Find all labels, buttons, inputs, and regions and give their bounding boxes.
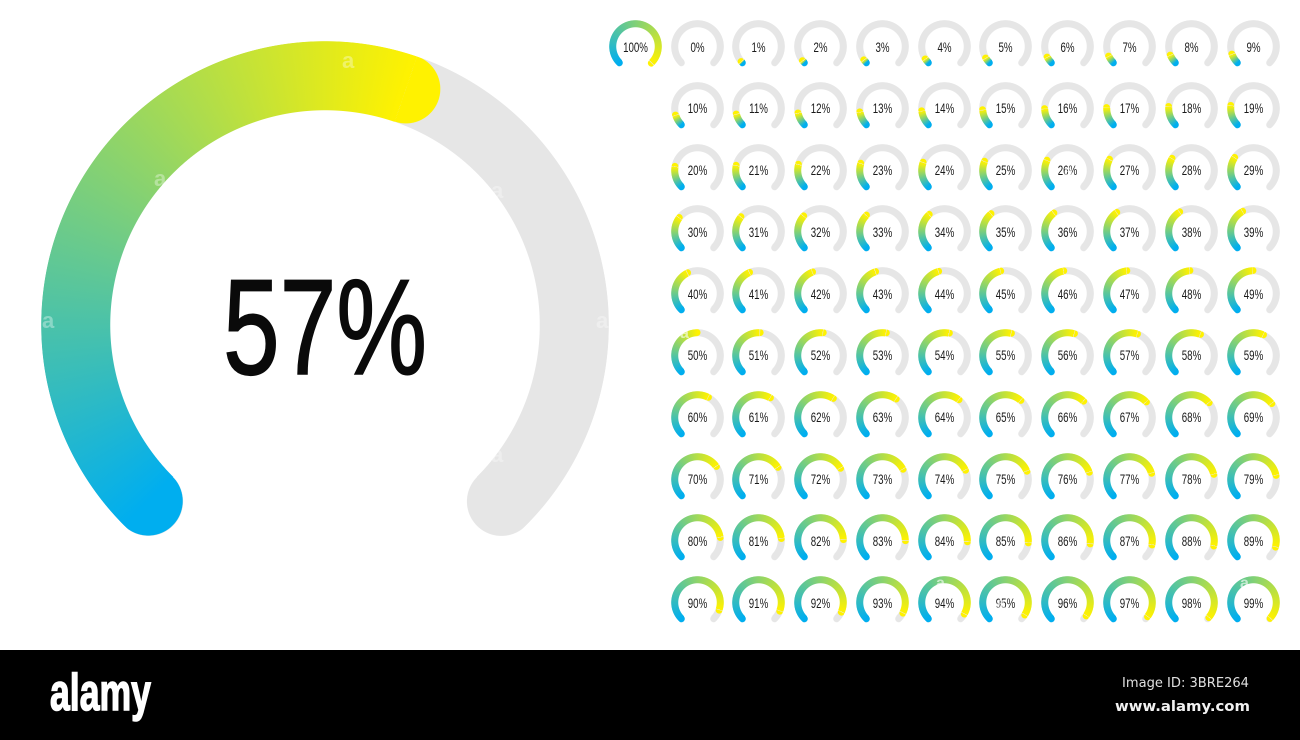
- gauge: 1%: 1%: [752, 40, 766, 54]
- watermark marks on small gauges: a: [996, 595, 1005, 612]
- watermark marks on large gauge: a: [342, 48, 354, 73]
- gauge: 99%: 99%: [1243, 596, 1263, 611]
- gauge: 13%: [856, 82, 909, 128]
- gauge: 46%: 46%: [1058, 287, 1078, 302]
- gauge: 74%: 74%: [934, 472, 954, 487]
- gauge: 44%: 44%: [934, 287, 954, 302]
- gauge: 12%: 12%: [811, 101, 830, 116]
- gauge: 68%: [1165, 391, 1218, 438]
- gauge: 93%: 93%: [873, 596, 892, 611]
- gauge: 56%: [1041, 329, 1094, 376]
- gauge: 97%: 97%: [1120, 596, 1139, 611]
- gauge: 54%: 54%: [934, 348, 954, 363]
- gauge: 23%: [856, 144, 909, 190]
- gauge: 35%: [979, 205, 1032, 252]
- gauge: 4%: [918, 20, 971, 66]
- gauge: 31%: 31%: [749, 225, 769, 240]
- gauge: 3%: [856, 20, 909, 66]
- gauge: 13%: 13%: [873, 101, 892, 116]
- gauge: 15%: 15%: [996, 101, 1016, 116]
- watermark marks on large gauge: a: [596, 308, 608, 333]
- gauge: 85%: [979, 514, 1032, 567]
- gauge: 86%: [1041, 514, 1094, 567]
- gauge: 58%: [1165, 329, 1218, 376]
- gauge: 44%: [918, 267, 971, 314]
- watermark marks on large gauge: a: [42, 308, 54, 333]
- gauge: 100%: [609, 20, 662, 67]
- gauge: 50%: [671, 329, 724, 376]
- gauge: 58%: 58%: [1182, 348, 1201, 363]
- gauge: 94%: 94%: [934, 596, 954, 611]
- gauge: 47%: 47%: [1120, 287, 1139, 302]
- gauge: 10%: 10%: [687, 101, 707, 116]
- gauge: 9%: [1227, 20, 1280, 66]
- gauge: 57%: [1103, 329, 1156, 376]
- gauge: 61%: 61%: [749, 410, 769, 425]
- gauge: 28%: [1165, 144, 1218, 190]
- gauge: 82%: [794, 514, 847, 567]
- gauge: 15%: [979, 82, 1032, 128]
- gauge: 60%: [671, 391, 724, 438]
- gauge: 20%: [671, 144, 724, 190]
- gauge: 91%: [732, 576, 785, 629]
- gauge: 59%: [1227, 329, 1280, 376]
- gauge: 28%: 28%: [1182, 163, 1201, 178]
- gauge: 3%: 3%: [875, 40, 889, 54]
- watermark marks on large gauge: a: [154, 166, 166, 191]
- gauge: 87%: 87%: [1120, 534, 1139, 549]
- gauge: 50%: 50%: [687, 348, 707, 363]
- gauge: 80%: 80%: [687, 534, 707, 549]
- gauge: 33%: [856, 205, 909, 252]
- gauge: 2%: 2%: [814, 40, 828, 54]
- gauge: 76%: [1041, 453, 1094, 506]
- gauge: 18%: 18%: [1182, 101, 1201, 116]
- gauge: 71%: 71%: [749, 472, 769, 487]
- gauge: 53%: 53%: [873, 348, 892, 363]
- gauge: 62%: [794, 391, 847, 438]
- gauge: 6%: [1041, 20, 1094, 66]
- gauge: 17%: 17%: [1120, 101, 1139, 116]
- footer image id and url: [1100, 670, 1280, 720]
- gauge: 95%: 95%: [996, 596, 1016, 611]
- small gauge grid: [609, 20, 1280, 622]
- watermark marks on small gauges: a: [936, 575, 945, 592]
- watermark marks on small gauges: a: [1064, 163, 1073, 180]
- gauge: 52%: 52%: [811, 348, 830, 363]
- gauge: 77%: [1103, 453, 1156, 506]
- gauge: 83%: [856, 514, 909, 567]
- gauge: 63%: [856, 391, 909, 438]
- gauge: 18%: [1165, 82, 1218, 128]
- large gauge: 57%: [41, 41, 609, 536]
- gauge: 100%: 100%: [623, 40, 648, 54]
- gauge: 64%: [918, 391, 971, 438]
- gauge: 4%: 4%: [937, 40, 951, 54]
- gauge: 1%: [732, 20, 785, 66]
- gauge: 73%: [856, 453, 909, 500]
- gauge: 26%: 26%: [1058, 163, 1078, 178]
- gauge: 55%: [979, 329, 1032, 376]
- gauge: 43%: 43%: [873, 287, 892, 302]
- gauge: 30%: [671, 205, 724, 252]
- gauge: 63%: 63%: [873, 410, 892, 425]
- gauge: 11%: 11%: [749, 101, 768, 116]
- gauge: 42%: [794, 267, 847, 314]
- gauge: 21%: [732, 144, 785, 190]
- gauge: 56%: 56%: [1058, 348, 1078, 363]
- gauge: 34%: 34%: [934, 225, 954, 240]
- gauge: 14%: 14%: [934, 101, 954, 116]
- gauge: 41%: [732, 267, 785, 314]
- gauge: 76%: 76%: [1058, 472, 1078, 487]
- gauge: 75%: [979, 453, 1032, 506]
- gauge: 12%: [794, 82, 847, 128]
- gauge: 27%: 27%: [1120, 163, 1139, 178]
- gauge: 7%: 7%: [1123, 40, 1137, 54]
- gauge: 2%: [794, 20, 847, 66]
- gauge: 40%: [671, 267, 724, 314]
- watermark marks on small gauges: a: [680, 325, 689, 342]
- gauge: 5%: [979, 20, 1032, 66]
- gauge: 59%: 59%: [1243, 348, 1263, 363]
- gauge: 35%: 35%: [996, 225, 1016, 240]
- watermark marks on small gauges: [660, 150, 1290, 620]
- gauge: 65%: 65%: [996, 410, 1016, 425]
- gauge: 45%: 45%: [996, 287, 1016, 302]
- gauge: 42%: 42%: [811, 287, 830, 302]
- gauge: 27%: [1103, 144, 1156, 190]
- gauge: 39%: 39%: [1243, 225, 1263, 240]
- gauge: 75%: 75%: [996, 472, 1016, 487]
- gauge: 29%: 29%: [1243, 163, 1263, 178]
- gauge: 88%: 88%: [1182, 534, 1201, 549]
- gauge: 21%: 21%: [749, 163, 769, 178]
- gauge: 48%: [1165, 267, 1218, 314]
- gauge: 70%: 70%: [687, 472, 707, 487]
- gauge: 92%: 92%: [811, 596, 830, 611]
- gauge: 5%: 5%: [999, 40, 1013, 54]
- gauge: 19%: [1227, 82, 1280, 128]
- gauge: 23%: 23%: [873, 163, 892, 178]
- gauge: 29%: [1227, 144, 1280, 190]
- gauge: 72%: 72%: [811, 472, 830, 487]
- gauge: 70%: [671, 453, 724, 500]
- gauge: 9%: 9%: [1246, 40, 1260, 54]
- gauge: 32%: [794, 205, 847, 252]
- gauge: 96%: [1041, 576, 1094, 629]
- gauge: 77%: 77%: [1120, 472, 1139, 487]
- gauge: 86%: 86%: [1058, 534, 1078, 549]
- gauge: 37%: [1103, 205, 1156, 252]
- footer image id and url: Image ID: 3BRE264: [1122, 675, 1249, 691]
- gauge: 46%: [1041, 267, 1094, 314]
- footer bar: [0, 650, 1300, 740]
- gauge: 80%: [670, 514, 724, 567]
- gauge: 45%: [979, 267, 1032, 314]
- gauge: 53%: [856, 329, 909, 376]
- gauge: 7%: [1103, 20, 1156, 66]
- gauge: 71%: [732, 453, 785, 500]
- gauge: 38%: [1165, 205, 1218, 252]
- gauge: 97%: [1103, 576, 1156, 629]
- gauge: 26%: [1041, 144, 1094, 190]
- gauge: 49%: 49%: [1243, 287, 1263, 302]
- gauge: 57%: 57%: [1120, 348, 1139, 363]
- gauge: 74%: [918, 453, 971, 500]
- gauge: 40%: 40%: [687, 287, 707, 302]
- gauge: 51%: 51%: [749, 348, 769, 363]
- gauge: 83%: 83%: [873, 534, 892, 549]
- gauge: 14%: [918, 82, 971, 128]
- gauge: 90%: 90%: [687, 596, 707, 611]
- gauge: 43%: [856, 267, 909, 314]
- gauge: 8%: 8%: [1184, 40, 1198, 54]
- gauge: 0%: [671, 20, 724, 66]
- gauge: 81%: [732, 514, 785, 567]
- gauge: 66%: [1041, 391, 1094, 438]
- gauge: 19%: 19%: [1243, 101, 1263, 116]
- gauge: 52%: [794, 329, 847, 376]
- footer image id and url: www.alamy.com: [1115, 699, 1250, 715]
- gauge: 25%: [979, 144, 1032, 190]
- gauge: 79%: [1227, 453, 1280, 506]
- watermark marks on small gauges: a: [1240, 575, 1249, 592]
- gauge: 94%: [918, 576, 971, 629]
- gauge: 89%: 89%: [1243, 534, 1263, 549]
- gauge: 24%: 24%: [934, 163, 954, 178]
- gauge: 72%: [794, 453, 847, 500]
- gauge: 62%: 62%: [811, 410, 830, 425]
- gauge: 37%: 37%: [1120, 225, 1139, 240]
- gauge: 96%: 96%: [1058, 596, 1078, 611]
- gauge: 36%: 36%: [1058, 225, 1078, 240]
- gauge: 60%: 60%: [687, 410, 707, 425]
- watermark marks on large gauge: a: [491, 442, 503, 467]
- gauge: 79%: 79%: [1243, 472, 1263, 487]
- gauge: 78%: 78%: [1182, 472, 1201, 487]
- gauge: 30%: 30%: [687, 225, 707, 240]
- gauge: 69%: [1227, 391, 1280, 438]
- gauge: 65%: [979, 391, 1032, 438]
- gauge: 22%: [794, 144, 847, 190]
- gauge: 73%: 73%: [873, 472, 892, 487]
- gauge: 20%: 20%: [687, 163, 707, 178]
- gauge: 92%: [794, 576, 847, 629]
- gauge: 82%: 82%: [811, 534, 830, 549]
- watermark marks on large gauge: [42, 48, 608, 467]
- gauge: 49%: [1227, 267, 1280, 314]
- gauge: 84%: [918, 514, 971, 567]
- gauge: 6%: 6%: [1061, 40, 1075, 54]
- gauge: 98%: [1165, 576, 1218, 629]
- gauge: 90%: [670, 576, 724, 629]
- gauge: 25%: 25%: [996, 163, 1016, 178]
- gauge: 54%: [918, 329, 971, 376]
- gauge: 17%: [1103, 82, 1156, 128]
- gauge: 69%: 69%: [1243, 410, 1263, 425]
- gauge: 67%: 67%: [1120, 410, 1139, 425]
- gauge: 64%: 64%: [934, 410, 954, 425]
- gauge: 84%: 84%: [934, 534, 954, 549]
- gauge: 51%: [732, 329, 785, 376]
- gauge: 8%: [1165, 20, 1218, 66]
- gauge: 32%: 32%: [811, 225, 830, 240]
- gauge: 55%: 55%: [996, 348, 1016, 363]
- gauge: 67%: [1103, 391, 1156, 438]
- gauge: 39%: [1227, 205, 1280, 252]
- gauge: 89%: [1227, 514, 1280, 567]
- gauge: 0%: 0%: [690, 40, 704, 54]
- gauge: 68%: 68%: [1182, 410, 1201, 425]
- gauge: 87%: [1103, 514, 1156, 567]
- gauge: 98%: 98%: [1182, 596, 1201, 611]
- gauge: 41%: 41%: [749, 287, 769, 302]
- gauge: 47%: [1103, 267, 1156, 314]
- gauge: 93%: [856, 576, 909, 629]
- gauge: 48%: 48%: [1182, 287, 1201, 302]
- gauge: 88%: [1165, 514, 1218, 567]
- gauge: 36%: [1041, 205, 1094, 252]
- gauge: 38%: 38%: [1182, 225, 1201, 240]
- gauge: 16%: [1041, 82, 1094, 128]
- gauge: 16%: 16%: [1058, 101, 1078, 116]
- gauge: 99%: [1227, 576, 1280, 629]
- gauge: 61%: [732, 391, 785, 438]
- gauge: 81%: 81%: [749, 534, 769, 549]
- gauge: 31%: [732, 205, 785, 252]
- gauge: 95%: [979, 576, 1032, 629]
- gauge: 11%: [732, 82, 785, 128]
- gauge: 34%: [918, 205, 971, 252]
- gauge: 66%: 66%: [1058, 410, 1078, 425]
- gauge: 33%: 33%: [873, 225, 892, 240]
- gauge: 91%: 91%: [749, 596, 769, 611]
- gauge: 24%: [918, 144, 971, 190]
- gauge: 78%: [1165, 453, 1218, 506]
- gauge: 22%: 22%: [811, 163, 830, 178]
- watermark marks on large gauge: a: [491, 178, 503, 203]
- gauge: 10%: [671, 82, 724, 128]
- gauge: 85%: 85%: [996, 534, 1016, 549]
